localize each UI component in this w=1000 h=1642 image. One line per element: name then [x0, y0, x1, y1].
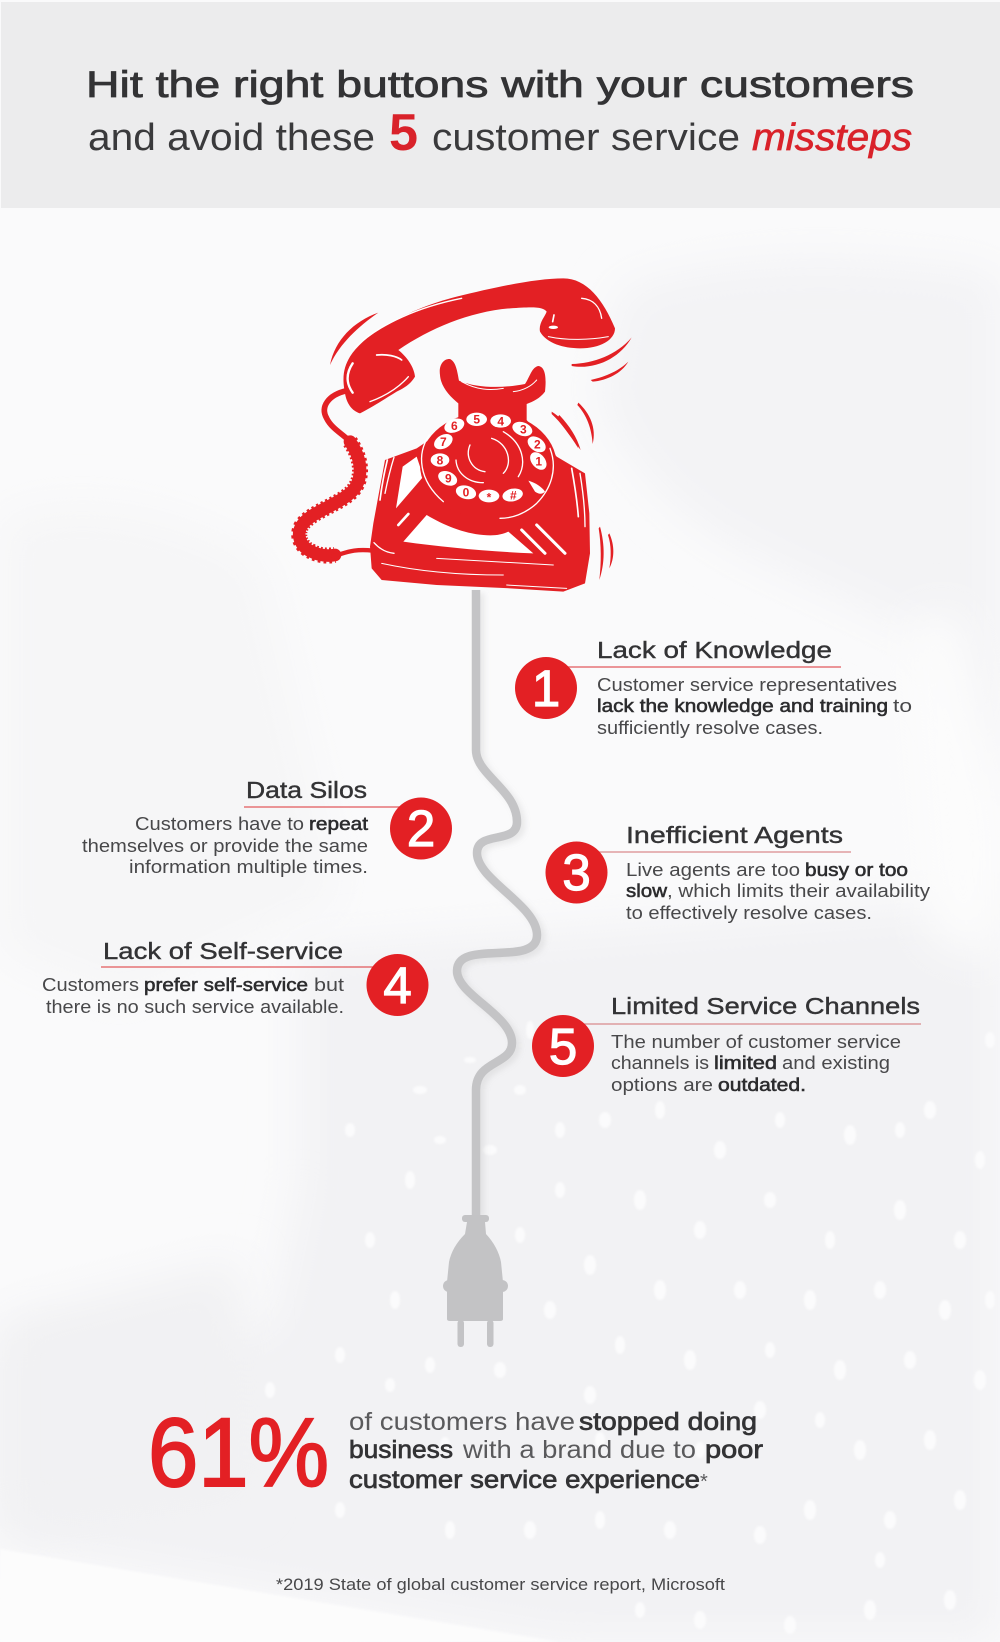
statistic description: * — [700, 1471, 708, 1493]
underline — [101, 966, 385, 968]
body text: outdated. — [718, 1075, 806, 1095]
number badge 2: 2 — [407, 800, 435, 857]
body text — [82, 814, 368, 877]
body text: busy or too — [805, 860, 908, 880]
dial digits: # — [510, 488, 517, 502]
body text: information multiple times. — [129, 857, 368, 877]
title line two: customer service — [432, 117, 740, 159]
body text: sufficiently resolve cases. — [597, 718, 823, 738]
body text: options are — [611, 1075, 713, 1095]
body text: limited — [714, 1053, 777, 1073]
body text: , which limits their availability — [667, 881, 930, 901]
body text — [626, 860, 930, 923]
body text — [611, 1032, 901, 1095]
body text: prefer self-service — [144, 975, 308, 995]
icon: plug — [443, 1215, 508, 1347]
footnote source: *2019 State of global customer service report, Microsoft — [276, 1576, 725, 1594]
number badge 1 — [515, 657, 577, 719]
motion lines — [330, 313, 632, 580]
dial digits: 3 — [520, 422, 527, 436]
phone base — [370, 359, 590, 592]
body text: Customers — [42, 975, 139, 995]
body text: slow — [626, 881, 668, 901]
header band — [1, 2, 1000, 208]
body text: Customer service representatives — [597, 675, 897, 695]
number badge 5 — [532, 1015, 594, 1077]
body text: to effectively resolve cases. — [626, 903, 872, 923]
underline — [244, 806, 410, 808]
body text: to — [893, 696, 912, 716]
number badge 3 — [546, 842, 608, 904]
title line two — [88, 104, 912, 162]
number badge 5: 5 — [549, 1018, 577, 1075]
dial number holes — [431, 413, 550, 503]
body text: Customers have to — [135, 814, 304, 834]
dial digits: 1 — [535, 454, 542, 468]
body text: channels is — [611, 1053, 709, 1073]
statistic description — [349, 1408, 763, 1494]
body text: The number of customer service — [611, 1032, 901, 1052]
body text — [597, 675, 912, 738]
statistic description: of customers have — [349, 1408, 575, 1436]
heading: Data Silos — [246, 777, 367, 803]
dial digits: 7 — [440, 435, 447, 449]
dial digits: 5 — [473, 413, 480, 427]
step 2: Data Silos — [82, 777, 452, 877]
body text: themselves or provide the same — [82, 836, 368, 856]
statistic description: business — [349, 1436, 453, 1464]
step 4: Lack of Self-service — [42, 938, 428, 1017]
dial digits — [437, 413, 542, 505]
rotary dial — [420, 412, 557, 518]
big statistic: 61% — [148, 1398, 329, 1507]
body text: and existing — [782, 1053, 890, 1073]
step 3: Inefficient Agents — [546, 822, 930, 923]
dial digits: 2 — [534, 438, 541, 452]
heading: Lack of Self-service — [103, 938, 343, 964]
dial digits: 9 — [445, 472, 452, 486]
statistic description: stopped doing — [579, 1408, 757, 1436]
title line two: 5 — [389, 104, 418, 162]
icon: ringing red telephone — [299, 278, 632, 592]
body text — [42, 975, 344, 1017]
body text: but — [314, 975, 344, 995]
number badge 4: 4 — [383, 957, 412, 1014]
heading: Lack of Knowledge — [597, 637, 832, 663]
handset highlights — [348, 298, 608, 402]
dial digits: 4 — [497, 414, 504, 428]
dial digits: 0 — [463, 486, 470, 500]
body text: repeat — [309, 814, 368, 834]
step 1: Lack of Knowledge — [515, 637, 912, 738]
body text: lack the knowledge and training — [597, 696, 888, 716]
number badge 3: 3 — [562, 844, 591, 901]
dial digits: * — [487, 491, 492, 505]
statistic description: customer service experience — [349, 1466, 700, 1494]
underline — [590, 851, 851, 853]
cord from phone to plug — [457, 590, 541, 1218]
base highlights — [374, 380, 585, 588]
number badge 1: 1 — [532, 660, 560, 717]
title line two: and avoid these — [88, 117, 375, 159]
body text: there is no such service available. — [46, 997, 344, 1017]
underline — [560, 666, 841, 668]
statistic description: with a brand due to — [462, 1436, 696, 1464]
handset — [343, 278, 615, 413]
body text: Live agents are too — [626, 860, 800, 880]
base cut-outs — [396, 457, 533, 553]
handset cord — [299, 391, 373, 556]
step 5: Limited Service Channels — [532, 993, 921, 1095]
underline — [580, 1023, 921, 1025]
title line two: missteps — [752, 117, 912, 159]
dial digits: 8 — [437, 453, 444, 467]
statistic description: poor — [705, 1436, 763, 1464]
heading: Inefficient Agents — [626, 822, 843, 848]
title line one: Hit the right buttons with your customers — [86, 64, 914, 105]
number badge 4 — [366, 954, 428, 1016]
number badge 2 — [390, 798, 452, 860]
heading: Limited Service Channels — [611, 993, 920, 1019]
dial digits: 6 — [451, 419, 458, 433]
